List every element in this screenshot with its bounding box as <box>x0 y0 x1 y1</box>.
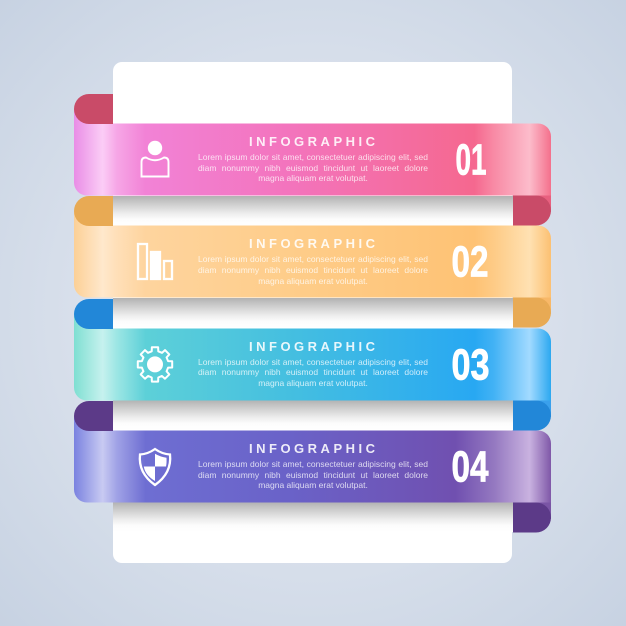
icon: bar chart <box>138 244 172 279</box>
heading: INFOGRAPHIC <box>249 339 378 354</box>
panel: ribbon 01 <box>74 94 551 226</box>
band shadow 3 <box>113 400 513 430</box>
text block: diam nonummy nibh euismod tincidunt ut laoreet dolore <box>198 367 428 377</box>
ribbon fold corner <box>529 196 551 212</box>
heading: INFOGRAPHIC <box>249 134 378 149</box>
text block: Lorem ipsum dolor sit amet, consectetuer adipiscing elit, sed <box>198 357 428 367</box>
text block: Lorem ipsum dolor sit amet, consectetuer adipiscing elit, sed <box>198 152 428 162</box>
ribbon band <box>74 416 551 502</box>
number 03: 03 <box>452 340 490 389</box>
ribbon band <box>74 109 551 196</box>
icon: person <box>142 141 168 176</box>
icon: gear <box>138 347 172 381</box>
number 01: 01 <box>456 136 486 184</box>
text block: magna aliquam erat volutpat. <box>258 480 368 490</box>
left fold tab <box>74 196 113 226</box>
ribbon fold corner <box>529 400 551 417</box>
text block: diam nonummy nibh euismod tincidunt ut laoreet dolore <box>198 163 428 173</box>
text block: magna aliquam erat volutpat. <box>258 378 368 388</box>
band shadow 2 <box>113 298 513 328</box>
text block: diam nonummy nibh euismod tincidunt ut laoreet dolore <box>198 265 428 275</box>
right fold tab <box>513 298 551 328</box>
text block: diam nonummy nibh euismod tincidunt ut laoreet dolore <box>198 470 428 480</box>
heading: INFOGRAPHIC <box>249 441 378 456</box>
text block: Lorem ipsum dolor sit amet, consectetuer adipiscing elit, sed <box>198 459 428 469</box>
text block <box>198 152 428 183</box>
text block <box>198 357 428 388</box>
ribbon fold corner <box>529 298 551 314</box>
panel: ribbon 03 <box>74 299 551 430</box>
icon: shield <box>140 449 170 485</box>
text block: magna aliquam erat volutpat. <box>258 276 368 286</box>
band shadow 1 <box>113 196 513 226</box>
band shadow 4 <box>113 502 513 532</box>
ribbon band <box>74 211 551 298</box>
left fold tab <box>74 299 113 329</box>
white card <box>113 62 512 563</box>
text block: magna aliquam erat volutpat. <box>258 173 368 183</box>
right fold tab <box>513 400 551 430</box>
ribbon band <box>74 314 551 400</box>
left fold tab <box>74 401 113 431</box>
ribbon fold corner <box>529 502 551 519</box>
heading: INFOGRAPHIC <box>249 236 378 251</box>
text block <box>198 254 428 286</box>
left fold tab <box>74 94 113 124</box>
panel: ribbon 02 <box>74 196 551 328</box>
panel: ribbon 04 <box>74 401 551 532</box>
text block: Lorem ipsum dolor sit amet, consectetuer adipiscing elit, sed <box>198 254 428 264</box>
number 04: 04 <box>452 442 489 491</box>
text block <box>198 459 428 490</box>
right fold tab <box>513 196 551 226</box>
number 02: 02 <box>452 238 488 287</box>
right fold tab <box>513 502 551 532</box>
